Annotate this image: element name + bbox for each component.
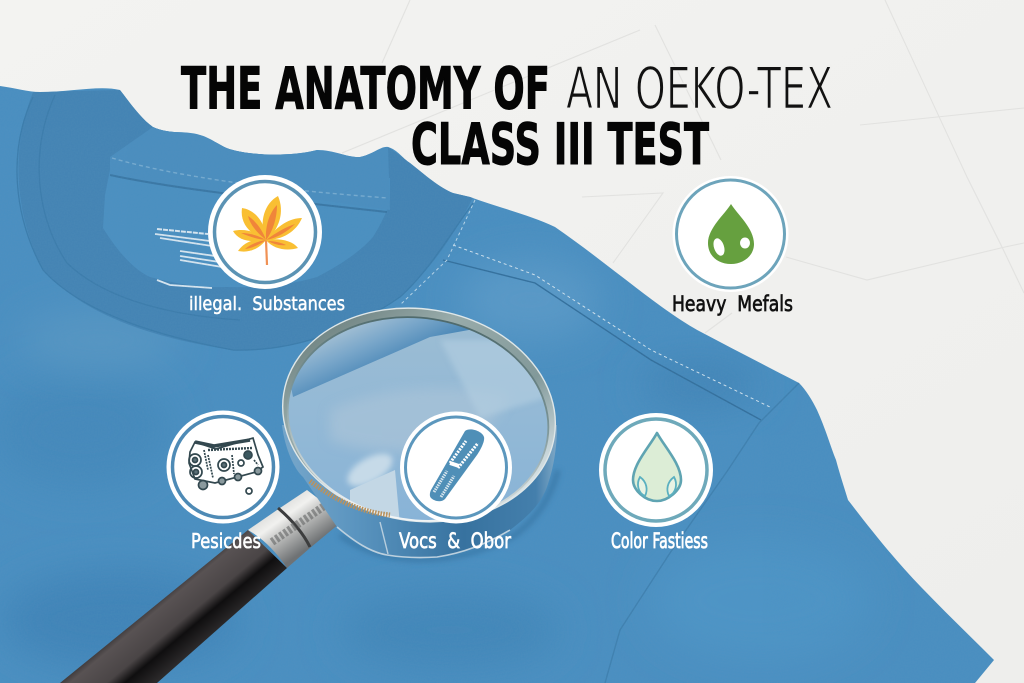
magnifying glass	[60, 289, 571, 683]
fabric weave	[156, 200, 770, 407]
shoulder seam	[443, 260, 761, 420]
back collar band	[110, 127, 390, 210]
label: color fastness: Color Fastiess	[611, 529, 708, 553]
lens body band	[282, 425, 557, 558]
label: illegal substances: illegal. Substances	[189, 293, 345, 315]
neck interior	[103, 165, 390, 287]
lens rim	[267, 289, 571, 541]
brass knurled ring	[310, 481, 390, 515]
collar band	[18, 90, 473, 350]
label: heavy metals: Heavy Mefals	[672, 292, 793, 316]
neck label print	[155, 229, 228, 288]
title: AN OEKO-TEX	[566, 54, 833, 122]
sleeve seam	[605, 383, 799, 683]
handle	[60, 484, 342, 683]
icon: illegal substances leaf	[208, 175, 322, 289]
lens glass	[288, 318, 548, 520]
collar stitching	[39, 95, 240, 320]
label: vocs and odor: Vocs & Obor	[399, 529, 511, 553]
icon: color fastness drop	[599, 413, 713, 527]
label: pesticides: Pesicdes	[191, 529, 261, 553]
icon: heavy metals drop	[672, 176, 788, 292]
fabric mottling	[0, 260, 870, 670]
lens inner edge	[273, 299, 563, 539]
band shadow	[340, 470, 558, 559]
icon: vocs test tube	[400, 412, 512, 524]
icon: pesticides machine	[166, 410, 280, 524]
title: THE ANATOMY OF	[181, 54, 550, 122]
title	[181, 54, 833, 178]
title: CLASS III TEST	[411, 112, 709, 178]
